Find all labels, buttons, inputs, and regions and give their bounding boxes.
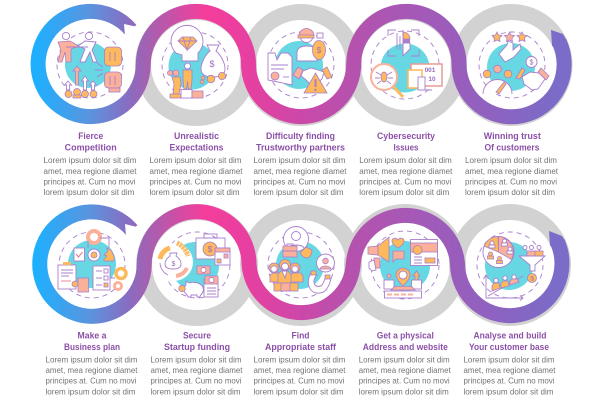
- heading: Fierce: [78, 131, 103, 141]
- panel: Winning trust Of customers: [465, 32, 559, 197]
- icon: customer pie chart, funnel and growth chart: $: [530, 276, 534, 282]
- heading: Make a: [78, 331, 107, 341]
- panel: Difficulty finding Trustworthy partners: [254, 29, 347, 197]
- text block: principes at. Cum no movi: [464, 376, 555, 386]
- heading: Appropriate staff: [265, 342, 336, 352]
- text block: amet, mea regione diamet: [359, 365, 451, 375]
- gray rings, top row: [143, 12, 564, 118]
- text block: lorem ipsum dolor sit dim: [150, 187, 240, 197]
- heading: Cybersecurity: [377, 131, 435, 141]
- icon: gears, strategy and checklist: [58, 231, 126, 298]
- icon: star rating, gauge and handshake: [479, 32, 549, 98]
- text block: [254, 155, 347, 197]
- heading: Issues: [394, 142, 419, 152]
- heading: [377, 131, 435, 152]
- text block: [464, 355, 556, 396]
- text block: [359, 355, 451, 396]
- heading: Get a physical: [377, 331, 434, 341]
- text block: lorem ipsum dolor sit dim: [359, 386, 449, 396]
- heading: Winning trust: [484, 131, 541, 141]
- text block: lorem ipsum dolor sit dim: [359, 187, 449, 197]
- text block: Lorem ipsum dolor sit dim: [465, 155, 557, 165]
- heading: Expectations: [170, 142, 224, 152]
- icon: hacker scan, bug magnifier and devices: 001: [425, 67, 436, 74]
- text block: [254, 355, 346, 396]
- heading: Unrealistic: [174, 131, 219, 141]
- heading: [363, 331, 448, 352]
- text block: Lorem ipsum dolor sit dim: [44, 155, 136, 165]
- heading: [469, 331, 549, 352]
- heading: Trustworthy partners: [256, 142, 345, 152]
- text block: principes at. Cum no movi: [359, 376, 450, 386]
- text block: Lorem ipsum dolor sit dim: [359, 355, 450, 365]
- text block: lorem ipsum dolor sit dim: [46, 386, 136, 396]
- text block: Lorem ipsum dolor sit dim: [46, 355, 138, 365]
- panel: Cybersecurity Issues: [359, 30, 453, 197]
- text block: lorem ipsum dolor sit dim: [44, 187, 134, 197]
- heading: Your customer base: [469, 342, 549, 352]
- text block: Lorem ipsum dolor sit dim: [464, 355, 554, 365]
- text block: lorem ipsum dolor sit dim: [464, 386, 554, 396]
- text block: Lorem ipsum dolor sit dim: [254, 355, 346, 365]
- text block: lorem ipsum dolor sit dim: [254, 386, 344, 396]
- text block: [44, 155, 137, 197]
- icon: budget chart, briefcase, calculator and piggy bank: $: [172, 261, 176, 268]
- heading: Secure: [183, 331, 211, 341]
- icon: diamond dream, money bag and podium: $: [209, 59, 215, 69]
- text block: lorem ipsum dolor sit dim: [254, 187, 344, 197]
- icon: tug of war, boxing gloves and rising coins: [57, 32, 123, 98]
- text block: amet, mea regione diamet: [44, 166, 137, 176]
- heading: Competition: [65, 142, 117, 152]
- text block: principes at. Cum no movi: [150, 176, 242, 186]
- gradient ribbon, bottom row: [40, 212, 565, 316]
- text block: amet, mea regione diamet: [465, 166, 559, 176]
- icon: budget chart, briefcase, calculator and piggy bank: $: [208, 244, 213, 254]
- text block: [150, 355, 243, 396]
- text block: principes at. Cum no movi: [46, 376, 137, 386]
- icon: recruiting team, magnet and candidate: [268, 226, 334, 298]
- text block: lorem ipsum dolor sit dim: [465, 187, 555, 197]
- heading: Of customers: [484, 142, 540, 152]
- heading: [256, 131, 345, 152]
- gray rings, bottom row: [144, 212, 563, 318]
- heading: [265, 331, 336, 352]
- heading: Business plan: [64, 342, 120, 352]
- text block: principes at. Cum no movi: [254, 176, 346, 186]
- text block: Lorem ipsum dolor sit dim: [359, 155, 452, 165]
- heading: [65, 131, 117, 152]
- icon: contract, partner, handshake and warning: [268, 29, 334, 98]
- text block: amet, mea regione diamet: [150, 365, 243, 375]
- text block: amet, mea regione diamet: [150, 166, 243, 176]
- icon: contract, partner, handshake and warning: $: [317, 46, 322, 55]
- text block: [46, 355, 138, 396]
- text block: Lorem ipsum dolor sit dim: [150, 355, 242, 365]
- text block: amet, mea regione diamet: [46, 365, 138, 375]
- text block: amet, mea regione diamet: [359, 166, 453, 176]
- text block: principes at. Cum no movi: [150, 376, 242, 386]
- text block: lorem ipsum dolor sit dim: [150, 386, 240, 396]
- icon: budget chart, briefcase, calculator and piggy bank: [155, 232, 230, 298]
- heading: [164, 331, 230, 352]
- icon: megaphone, website and location pin: [368, 231, 439, 299]
- gradient ribbon, top row: [38, 11, 567, 117]
- panel: Secure Startup funding: [150, 232, 243, 396]
- panel: Unrealistic Expectations: [150, 25, 243, 197]
- heading: Difficulty finding: [266, 131, 335, 141]
- heading: [484, 131, 541, 152]
- text block: Lorem ipsum dolor sit dim: [254, 155, 346, 165]
- panel: Get a physical Address and website: [359, 231, 451, 396]
- heading: [170, 131, 224, 152]
- text block: amet, mea regione diamet: [254, 365, 346, 375]
- heading: Startup funding: [164, 342, 230, 352]
- heading: [64, 331, 120, 352]
- text block: Lorem ipsum dolor sit dim: [150, 155, 242, 165]
- icon: hacker scan, bug magnifier and devices: 10: [428, 76, 436, 83]
- text block: [465, 155, 559, 197]
- icon: star rating, gauge and handshake: $: [530, 60, 534, 66]
- panel: Fierce Competition: [44, 32, 137, 197]
- text block: principes at. Cum no movi: [254, 376, 345, 386]
- text block: principes at. Cum no movi: [44, 176, 136, 186]
- panel: Find Appropriate staff: [254, 226, 346, 396]
- heading: Address and website: [363, 342, 448, 352]
- panel: Make a Business plan: [46, 231, 138, 396]
- heading: Analyse and build: [474, 331, 546, 341]
- icon: customer pie chart, funnel and growth chart: [477, 232, 545, 300]
- text block: amet, mea regione diamet: [254, 166, 347, 176]
- text block: [150, 155, 243, 197]
- panel: Analyse and build Your customer base: [464, 232, 556, 396]
- heading: Find: [292, 331, 310, 341]
- text block: principes at. Cum no movi: [359, 176, 451, 186]
- text block: amet, mea regione diamet: [464, 365, 556, 375]
- text block: principes at. Cum no movi: [465, 176, 557, 186]
- icon: diamond dream, money bag and podium: [162, 25, 228, 98]
- icon: hacker scan, bug magnifier and devices: [371, 30, 442, 99]
- text block: [359, 155, 453, 197]
